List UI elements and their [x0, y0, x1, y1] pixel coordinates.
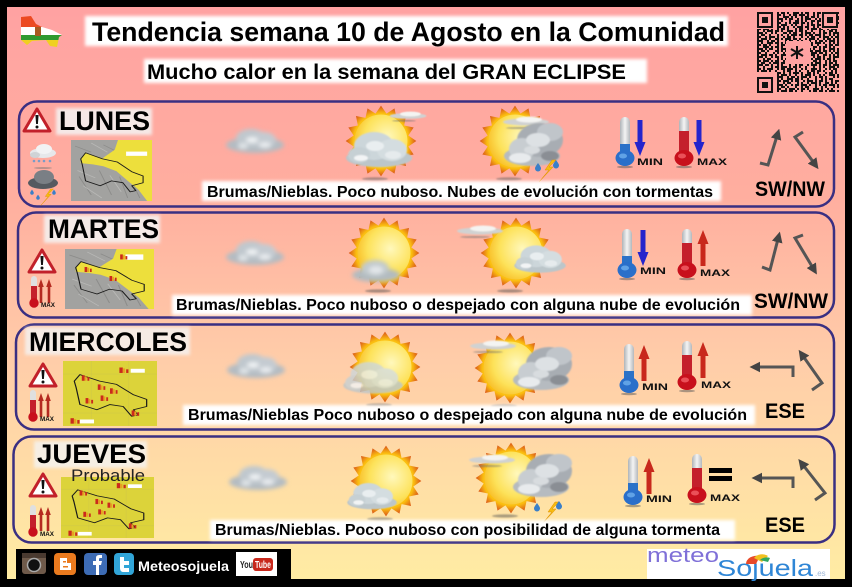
icon: La Rioja flag map — [21, 16, 62, 47]
day label: JUEVES — [37, 439, 146, 469]
icon: twitter — [114, 553, 134, 575]
max temperature warning icon — [28, 390, 54, 423]
thermometer max down — [674, 117, 727, 168]
icon: sun with cloud — [457, 218, 566, 293]
icon: sun with cloud — [347, 446, 421, 521]
icon: mist cloud — [229, 466, 287, 490]
icon: blogger — [54, 553, 76, 575]
icon: youtube: You — [240, 560, 253, 571]
icon: sun with storm — [469, 443, 572, 524]
description: Brumas/Nieblas. Poco nuboso con posibilidad de alguna tormenta — [215, 522, 720, 539]
wind direction: SW/NW — [754, 290, 828, 313]
wind arrows — [757, 356, 822, 390]
icon: youtube — [236, 552, 277, 576]
wind arrows — [760, 132, 814, 165]
probable label: Probable — [71, 466, 145, 485]
logo: meteosojuela: Sojuela — [717, 555, 813, 581]
panel: lunes — [19, 102, 834, 206]
thermometer min up — [624, 456, 672, 507]
max temperature warning icon — [29, 276, 55, 309]
icon: sun with storm — [480, 106, 563, 182]
day label: LUNES — [59, 106, 150, 136]
description: Brumas/Nieblas. Poco nuboso. Nubes de evolución con tormentas — [207, 184, 713, 201]
footer social bar — [16, 549, 291, 581]
icon: mist cloud — [226, 241, 284, 265]
thermometer min up — [620, 344, 668, 395]
icon: youtube: Tube — [255, 560, 271, 571]
description: Brumas/Nieblas. Poco nuboso o despejado con alguna nube de evolución — [176, 297, 740, 314]
thermometer max equal: MAX — [710, 493, 740, 503]
logo: meteosojuela: meteo — [647, 545, 719, 567]
warning icon — [30, 474, 56, 496]
thermometer min up: MIN — [646, 494, 672, 504]
icon: storm cloud — [28, 170, 58, 206]
thermometer max up — [678, 229, 730, 280]
warning map — [61, 477, 154, 538]
max temperature warning icon: MAX — [41, 303, 55, 309]
wind arrows — [759, 465, 825, 500]
icon: instagram — [22, 553, 46, 574]
warning icon — [30, 364, 56, 386]
icon: mist cloud — [226, 129, 284, 153]
description: Brumas/Nieblas Poco nuboso o despejado con alguna nube de evolución — [188, 407, 747, 424]
warning icon — [24, 109, 50, 131]
thermometer max up: MAX — [700, 268, 730, 278]
thermometer min up: MIN — [642, 382, 668, 392]
warning map — [63, 361, 157, 426]
warning icon — [29, 250, 55, 272]
warning map — [71, 140, 152, 201]
day label: MIERCOLES — [29, 327, 187, 357]
panel: martes — [18, 212, 834, 318]
icon: sun with small cloud — [349, 218, 419, 293]
thermometer max equal — [688, 454, 740, 505]
icon: sun with storm cloud — [470, 333, 572, 408]
thermometer min down — [616, 117, 663, 168]
icon: sun with cloud — [346, 106, 426, 181]
subtitle: Mucho calor en la semana del GRAN ECLIPSE — [147, 61, 626, 84]
panel: jueves — [14, 436, 834, 542]
icon: mist cloud — [227, 354, 285, 378]
day label: MARTES — [48, 214, 159, 244]
warning map — [65, 249, 154, 309]
thermometer min down: MIN — [640, 266, 666, 276]
max temperature warning icon — [28, 505, 54, 538]
wind direction: ESE — [765, 514, 805, 537]
icon: facebook — [84, 553, 107, 575]
wind direction: SW/NW — [755, 178, 825, 201]
wind arrows — [762, 235, 813, 270]
icon: sun with cloud — [343, 332, 420, 407]
icon: rain cloud — [30, 144, 56, 169]
panel: miercoles — [16, 324, 834, 430]
logo: meteosojuela — [647, 545, 830, 581]
QR code — [757, 12, 839, 93]
brand name: Meteosojuela — [138, 558, 229, 574]
max temperature warning icon: MAX — [40, 532, 54, 538]
title: Tendencia semana 10 de Agosto en la Comunidad — [92, 17, 725, 47]
thermometer min down — [618, 229, 666, 280]
logo: meteosojuela: .es — [815, 569, 826, 578]
wind direction: ESE — [765, 400, 805, 423]
thermometer max up: MAX — [701, 380, 731, 390]
thermometer max up — [678, 341, 731, 392]
max temperature warning icon: MAX — [40, 417, 54, 423]
thermometer max down: MAX — [697, 157, 727, 167]
thermometer min down: MIN — [637, 157, 663, 167]
